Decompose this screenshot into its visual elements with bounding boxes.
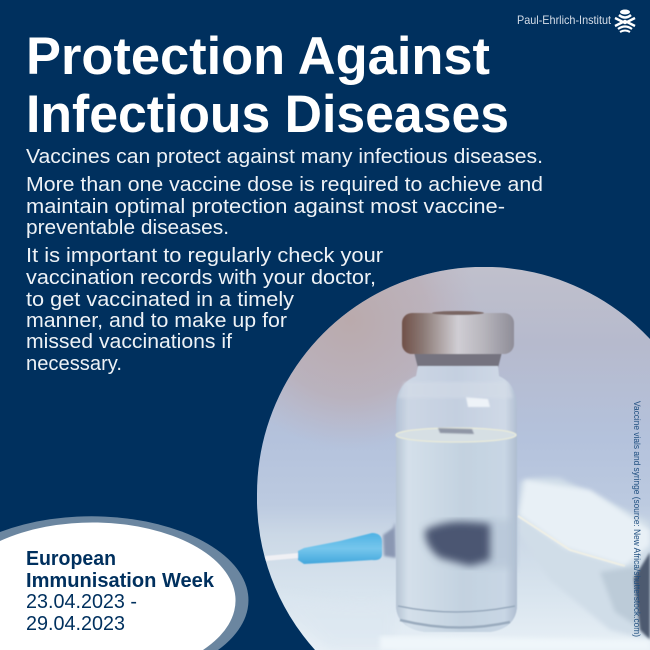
badge inner: [0, 522, 236, 650]
lying vial: [517, 478, 650, 640]
floor highlight: [277, 592, 286, 610]
badge heading: [26, 548, 215, 592]
foreground vial: [396, 311, 517, 632]
badge heading: European: [26, 548, 116, 570]
intro text: Vaccines can protect against many infectious diseases.: [26, 146, 543, 168]
records text: manner, and to make up for: [26, 310, 287, 332]
vial cap: [402, 313, 514, 354]
records text: vaccination records with your doctor,: [26, 267, 376, 289]
syringe: [265, 522, 396, 564]
badge outer ring: [0, 516, 248, 650]
logo emblem: [615, 10, 635, 32]
photo backdrop: [257, 267, 650, 650]
logo: Paul-Ehrlich-Institut: [517, 10, 635, 32]
dose text: maintain optimal protection against most vaccine-: [26, 196, 505, 218]
photo: vaccine vials and syringe: [257, 267, 650, 650]
badge dates: 23.04.2023 -: [26, 591, 137, 613]
records text: It is important to regularly check your: [26, 245, 383, 267]
records text: necessary.: [26, 353, 122, 375]
badge dates: [26, 591, 137, 635]
records text: to get vaccinated in a timely: [26, 289, 294, 311]
dose text: More than one vaccine dose is required to achieve and: [26, 174, 543, 196]
dose text: preventable diseases.: [26, 217, 229, 239]
date badge: [0, 516, 248, 650]
badge dates: 29.04.2023: [26, 613, 125, 635]
records text: [26, 245, 383, 375]
title: [26, 27, 509, 144]
records text: missed vaccinations if: [26, 331, 232, 353]
dose text: [26, 174, 543, 239]
title: Infectious Diseases: [26, 85, 509, 144]
title: Protection Against: [26, 27, 490, 86]
logo wordmark: Paul-Ehrlich-Institut: [517, 13, 612, 27]
badge heading: Immunisation Week: [26, 570, 215, 592]
